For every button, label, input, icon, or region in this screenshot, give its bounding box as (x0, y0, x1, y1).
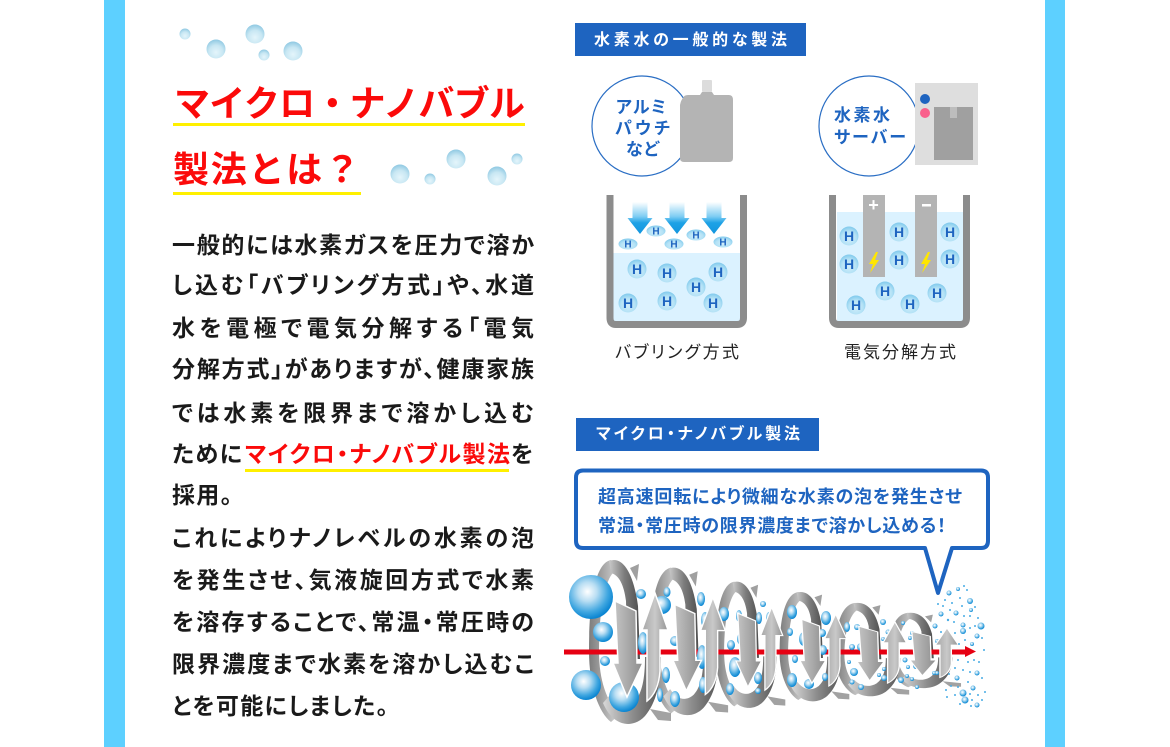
icon: aluminium pouch with label: など (626, 140, 660, 159)
body text: 水を電極で電気分解する「電気 (172, 315, 534, 341)
red flow line (564, 646, 976, 657)
body text: では水素を限界まで溶かし込む (172, 400, 534, 426)
heading: general production methods (575, 23, 806, 56)
hydrogen bubbles in water: H (894, 224, 904, 240)
body text: マイクロ・ナノバブル製法 (245, 441, 510, 467)
hydrogen bubbles in water (618, 260, 728, 312)
callout: 常温・常圧時の限界濃度まで溶かし込める！ (598, 516, 946, 536)
caption: electrolysis method: 電気分解方式 (844, 343, 956, 362)
title: 製法とは？ (173, 149, 360, 190)
body text: を溶存することで、常温・常圧時の (172, 609, 534, 635)
body text: ために (172, 441, 242, 467)
body text (172, 232, 534, 719)
hydrogen bubbles in water: H (844, 256, 854, 272)
body text: 分解方式」がありますが、健康家族 (172, 356, 534, 382)
heading: general production methods: 水素水の一般的な製法 (594, 30, 787, 49)
hydrogen bubbles in water: H (713, 264, 723, 280)
body text: とを可能にしました。 (172, 693, 388, 719)
body text: これによりナノレベルの水素の泡 (172, 525, 534, 551)
hydrogen bubbles in water: H (894, 252, 904, 268)
icon: aluminium pouch with label: アルミ (616, 98, 666, 117)
body text: 一般的には水素ガスを圧力で溶か (172, 232, 534, 258)
electrode: minus (915, 195, 937, 277)
hydrogen bubbles in water: H (932, 285, 942, 301)
bubbles inside the spiral (569, 575, 939, 712)
body text: 採用。 (172, 482, 232, 508)
hydrogen bubbles in water: H (662, 293, 672, 309)
right side band (1045, 0, 1065, 747)
body text: を発生させ、気液旋回方式で水素 (172, 567, 534, 593)
hydrogen bubbles in water: H (945, 251, 955, 267)
icon: hydrogen water server with label: サーバー (834, 128, 906, 147)
diagram: electrolysis method tank (832, 195, 966, 324)
title: マイクロ・ナノバブル (174, 83, 525, 124)
small hydrogen bubbles above water: H (624, 240, 632, 250)
title (173, 83, 525, 195)
diagram: bubbling method tank (610, 195, 744, 324)
heading: micro nano bubble method: マイクロ・ナノバブル製法 (596, 424, 800, 443)
electrode: plus: + (868, 195, 879, 215)
nano bubble spray (932, 587, 984, 708)
hydrogen bubbles in water: H (844, 228, 854, 244)
decorative bubbles beside heading (390, 150, 522, 186)
spiral arrows (613, 593, 958, 701)
icon: hydrogen water server with label: 水素水 (834, 106, 890, 125)
small hydrogen bubbles above water: H (652, 226, 660, 238)
body text: 限界濃度まで水素を溶かし込むこ (172, 651, 534, 677)
callout (576, 470, 988, 593)
small hydrogen bubbles above water: H (719, 238, 727, 248)
decorative bubbles top (180, 24, 302, 60)
hydrogen bubbles in water: H (945, 224, 955, 240)
small hydrogen bubbles above water: H (670, 240, 678, 250)
hydrogen bubbles in water: H (691, 279, 701, 295)
hydrogen bubbles in water: H (905, 296, 915, 312)
diagram: swirling micro nano bubbles (564, 560, 986, 724)
hydrogen bubbles in water: H (708, 295, 718, 311)
hydrogen bubbles in water: H (662, 265, 672, 281)
hydrogen bubbles in water: H (880, 283, 890, 299)
caption: bubbling method: バブリング方式 (615, 342, 739, 362)
icon: aluminium pouch with label: パウチ (615, 119, 670, 138)
icon: aluminium pouch with label (592, 76, 733, 176)
body text: を (511, 441, 533, 467)
spiral rings (589, 560, 961, 724)
hydrogen bubbles in water (840, 222, 960, 314)
small hydrogen bubbles above water (618, 226, 732, 250)
callout: 超高速回転により微細な水素の泡を発生させ (598, 487, 962, 507)
arrows: hydrogen gas going down (628, 202, 726, 234)
heading: micro nano bubble method (576, 418, 819, 451)
hydrogen bubbles in water: H (851, 297, 861, 313)
hydrogen bubbles in water: H (623, 295, 633, 311)
left side band (104, 0, 125, 747)
small hydrogen bubbles above water: H (692, 230, 700, 242)
hydrogen bubbles in water: H (632, 261, 642, 277)
icon: hydrogen water server with label (819, 76, 978, 176)
body text: し込む「バブリング方式」や、水道 (172, 272, 534, 298)
